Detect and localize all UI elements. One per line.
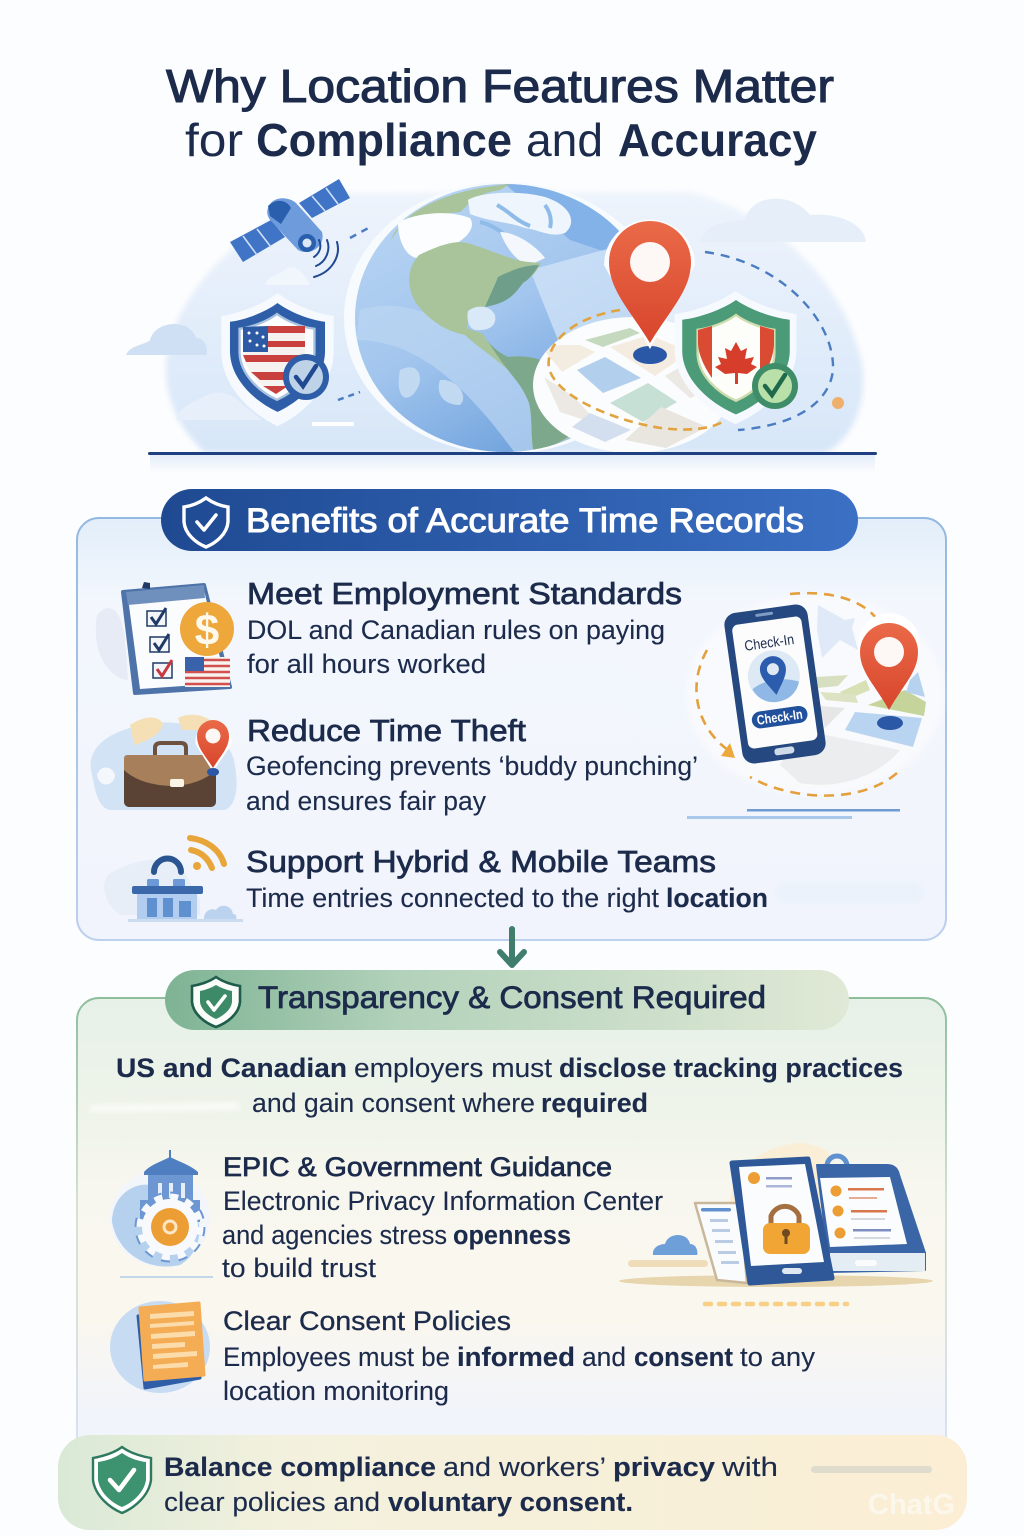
policy: clear consent: consent xyxy=(634,1342,733,1372)
disclosure statement: US and Canadian xyxy=(116,1053,347,1083)
guidance: EPIC and government: and agencies stress xyxy=(222,1220,447,1250)
icon: policy document xyxy=(110,1301,210,1393)
policy: clear consent: to any xyxy=(740,1342,816,1372)
policy: clear consent: Employees must be xyxy=(223,1342,450,1372)
ground line xyxy=(148,452,877,455)
watermark: ChatG xyxy=(868,1489,955,1521)
title: Compliance xyxy=(256,114,512,166)
banner heading xyxy=(161,489,858,551)
benefit: meet employment standards xyxy=(247,576,682,679)
dotted line xyxy=(705,1302,847,1306)
title xyxy=(166,60,834,166)
disclosure statement: disclose tracking practices xyxy=(559,1053,903,1083)
title: and xyxy=(526,114,603,166)
hero illustration: globe, pin, shields and satellite xyxy=(126,179,877,473)
benefit: meet employment standards: DOL and Canadian rules on paying xyxy=(247,615,665,645)
benefit: meet employment standards: Meet Employment Standards xyxy=(247,576,682,611)
title: for xyxy=(185,114,243,166)
title: Accuracy xyxy=(618,114,817,166)
disclosure statement: required xyxy=(541,1088,648,1118)
icon: green shield xyxy=(93,1447,151,1513)
icon: government building with gear xyxy=(110,1150,213,1278)
benefit: support hybrid and mobile teams: Time entries connected to the right xyxy=(246,883,660,913)
callout text: Balance compliance xyxy=(164,1452,436,1482)
guidance: EPIC and government: Electronic Privacy Information Center xyxy=(223,1186,663,1216)
benefit: meet employment standards: for all hours worked xyxy=(247,649,486,679)
callout: balance compliance and privacy xyxy=(58,1435,967,1530)
guidance: EPIC and government xyxy=(222,1152,663,1283)
callout text: with xyxy=(721,1452,778,1482)
policy: clear consent: Clear Consent Policies xyxy=(223,1306,511,1336)
panel: transparency and consent xyxy=(77,970,946,1468)
policy: clear consent: informed xyxy=(457,1342,575,1372)
map disc xyxy=(533,310,733,453)
arrow: down between sections xyxy=(500,929,524,965)
guidance: EPIC and government: EPIC & Government Guidance xyxy=(223,1152,612,1182)
policy: clear consent: location monitoring xyxy=(223,1376,449,1406)
title: Why Location Features Matter xyxy=(166,60,834,112)
callout text: and workers’ xyxy=(443,1452,606,1482)
banner heading xyxy=(165,970,849,1030)
satellite xyxy=(230,179,372,277)
globe xyxy=(344,182,666,460)
callout text: privacy xyxy=(613,1452,715,1482)
benefit: reduce time theft: Geofencing prevents ‘buddy punching’ xyxy=(246,751,698,781)
location pin xyxy=(604,220,695,364)
icon: briefcase with pin xyxy=(91,715,237,810)
callout text: clear policies and xyxy=(164,1487,380,1517)
pale road streak xyxy=(775,882,925,904)
benefit: support hybrid and mobile teams xyxy=(246,844,768,913)
illustration: phone check-in with map: Check-In xyxy=(743,632,795,655)
small orange marker xyxy=(832,397,844,409)
benefit: reduce time theft: and ensures fair pay xyxy=(246,786,487,816)
callout text: voluntary consent. xyxy=(388,1487,633,1517)
callout text xyxy=(164,1452,778,1517)
disclosure statement: employers must xyxy=(354,1053,553,1083)
pale streak xyxy=(90,1103,240,1112)
illustration: phone with lock and tablet xyxy=(619,1143,933,1287)
shield: United States xyxy=(221,293,360,426)
shield: Canada xyxy=(675,291,798,424)
disclosure statement xyxy=(116,1053,903,1118)
benefit: support hybrid and mobile teams: location xyxy=(666,883,768,913)
guidance: EPIC and government: to build trust xyxy=(222,1253,377,1283)
benefit: support hybrid and mobile teams: Support Hybrid & Mobile Teams xyxy=(246,844,716,879)
banner heading: Benefits of Accurate Time Records xyxy=(246,502,804,540)
illustration: phone check-in with map xyxy=(687,593,943,819)
icon: building with wifi xyxy=(104,838,243,922)
panel: benefits of accurate time records xyxy=(77,489,946,940)
icon: checklist with coin and flag xyxy=(96,582,234,693)
background cloud shape xyxy=(166,192,863,453)
pale glow below the ground line xyxy=(150,455,875,473)
policy: clear consent xyxy=(223,1306,816,1406)
disclosure statement: and gain consent where xyxy=(252,1088,535,1118)
benefit: reduce time theft xyxy=(246,713,698,816)
grey streak xyxy=(811,1466,932,1473)
benefit: reduce time theft: Reduce Time Theft xyxy=(247,713,526,748)
policy: clear consent: and xyxy=(582,1342,626,1372)
clouds xyxy=(126,199,866,420)
banner heading: Transparency & Consent Required xyxy=(258,979,766,1015)
illustration: phone check-in with map: Check-In xyxy=(756,707,803,728)
guidance: EPIC and government: openness xyxy=(453,1220,571,1250)
icon: checklist with coin and flag: $ xyxy=(195,606,219,655)
blue dashed orbit route xyxy=(705,252,833,430)
